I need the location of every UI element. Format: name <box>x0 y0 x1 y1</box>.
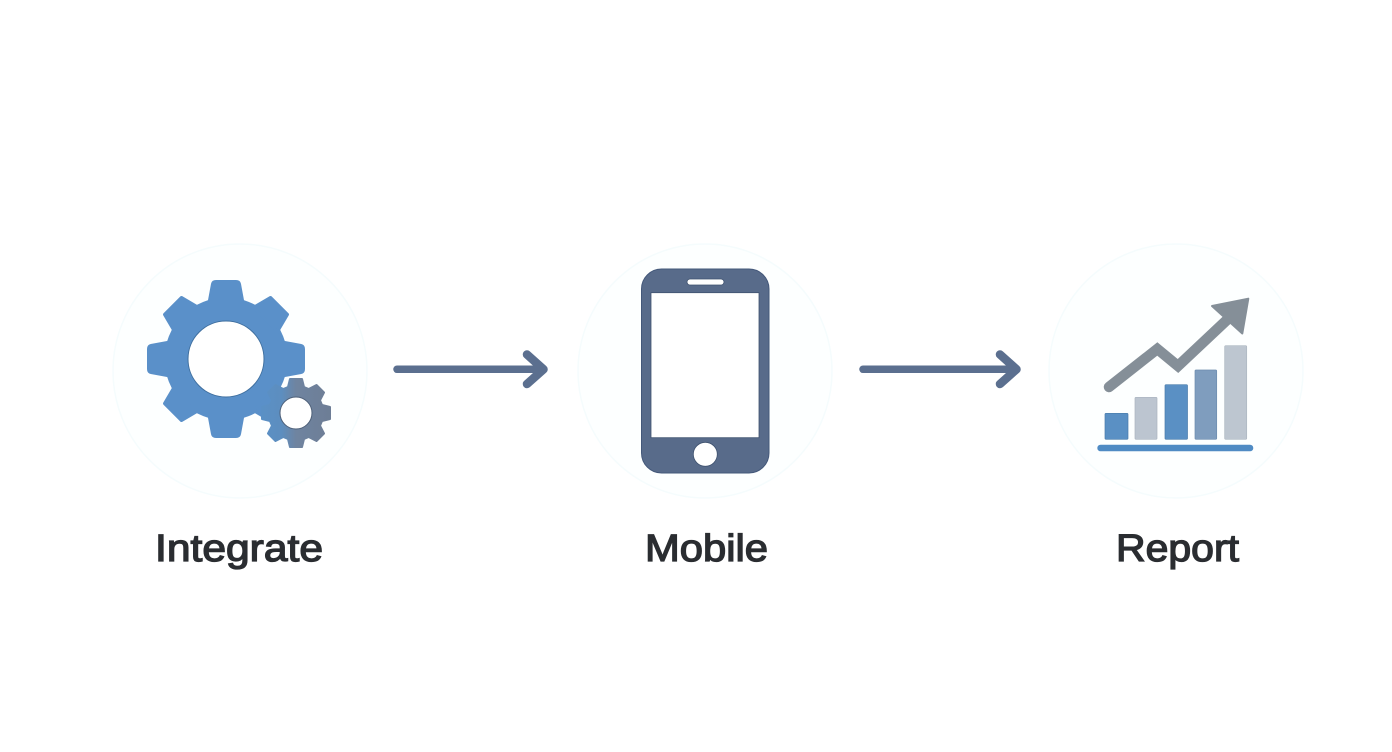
icon circle: mobile <box>578 244 832 498</box>
chart icon: growth bars <box>1097 346 1253 451</box>
icon: trend arrow <box>1109 299 1248 387</box>
panel: integrate <box>113 244 367 570</box>
panel: report <box>1049 244 1303 570</box>
arrow: integrate to mobile <box>397 354 544 384</box>
label: Mobile: Mobile <box>645 528 768 570</box>
icon: small gear <box>262 379 330 447</box>
icon circle: report <box>1049 244 1303 498</box>
panel: mobile <box>578 244 832 570</box>
icon circle: integrate <box>113 244 367 498</box>
label: Report: Report <box>1116 528 1239 570</box>
icon: smartphone <box>642 269 769 473</box>
icon: large gear <box>148 282 304 436</box>
label: Integrate: Integrate <box>155 528 323 570</box>
arrow: mobile to report <box>863 354 1016 384</box>
